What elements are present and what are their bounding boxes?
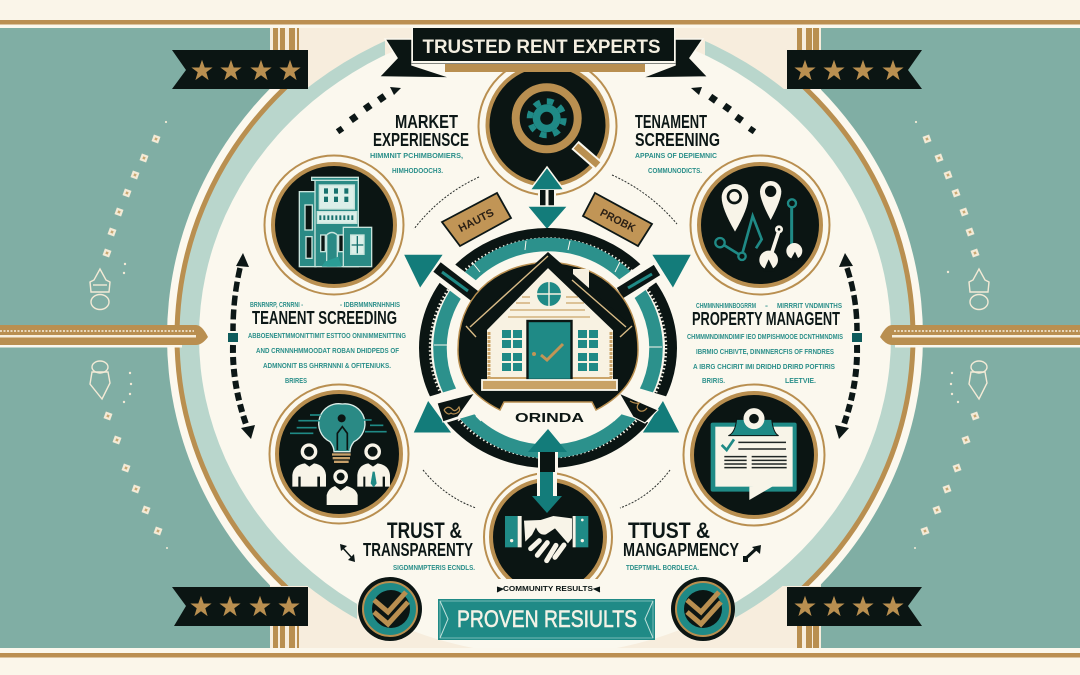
roof gold edge and cream tips: [466, 256, 632, 337]
text block: property managent: MIRRRIT VNDMINTHS: [777, 303, 842, 310]
small ribbon caption: COMMUNITY RESULTS: [503, 584, 593, 593]
text block: teanent screeding: [248, 302, 406, 385]
bottom banner: proven results: [438, 599, 655, 640]
circle: building icon: [264, 156, 404, 294]
door: [528, 321, 572, 380]
center house: [458, 252, 638, 425]
black backdrop: [458, 262, 638, 410]
text block: trust and transparenty: TRANSPARENTY: [363, 540, 473, 560]
round window: [537, 282, 561, 306]
title banner: [379, 27, 708, 78]
arrow: small left double: [340, 544, 355, 562]
arrow: bottom left diagonal with scroll: [413, 393, 475, 433]
star ribbon: top left: [172, 50, 308, 89]
circle: location pins and tools icon: [690, 156, 830, 294]
double arrow: top: [527, 167, 568, 230]
text block: tenament screening: [635, 112, 720, 175]
double arrow: bottom up: [528, 429, 567, 472]
right window: [578, 330, 598, 371]
text block: tenament screening: COMMUNODICTS.: [648, 168, 702, 175]
text block: tenament screening: SCREENING: [635, 130, 720, 150]
text block: tenament screening: TENAMENT: [635, 112, 707, 132]
icon: building: [299, 177, 372, 267]
center gauge ring: [425, 234, 671, 462]
text block: property managent: LEETVIE.: [785, 378, 816, 385]
location label: ORINDA: [515, 411, 584, 425]
icon: handshake: [505, 516, 588, 561]
down arrow: [532, 472, 562, 513]
icon: clipboard with speech tail: [711, 411, 797, 500]
text block: property managent: [687, 303, 843, 385]
text block: market experience: EXPERIENSCE: [373, 130, 469, 150]
gold corner stripes: [273, 28, 819, 648]
icon: pins and wrenches: [715, 181, 802, 271]
text block: teanent screeding: - IDBRMMNRNHNHIS: [340, 302, 400, 309]
text block: teanent screeding: ADMNONIT BS GHRRNNNI & OFITENIUKS.: [263, 363, 391, 370]
arrow: top left diagonal: [403, 254, 482, 300]
text block: market experience: HIMMNIT PCHIMBOMIERS,: [370, 153, 463, 160]
text block: ttust and mangapmency: MANGAPMENCY: [623, 540, 739, 560]
house body: [487, 268, 613, 380]
siding lines: [487, 297, 612, 378]
icon: magnifier lens with gear: [516, 87, 578, 149]
icon: bulb and three people: [290, 404, 390, 505]
check badge: left: [358, 577, 422, 641]
foundation: [482, 380, 617, 390]
title text: TRUSTED RENT EXPERTS: [422, 37, 660, 58]
circle: top magnifier icon: [478, 57, 616, 195]
text block: teanent screeding: BRNRNRP, CRNRNI -: [250, 302, 304, 309]
panel: right teal background: [821, 28, 1080, 648]
arrow: small right diagonal: [743, 545, 761, 562]
text block: tenament screening: APPAINS OF DEPIEMNIC: [635, 153, 717, 160]
central medallion background rings: [167, 41, 923, 648]
arrow: left curved dashed double arrow: [228, 253, 255, 439]
left divider bar: [0, 325, 208, 348]
text block: market experience: MARKET: [395, 112, 458, 132]
text block: property managent: -: [765, 303, 769, 310]
text block: teanent screeding: TEANENT SCREEDING: [252, 308, 397, 328]
text block: market experience: [370, 112, 469, 175]
star ribbon: top right: [787, 50, 922, 89]
dotted connector arcs: [414, 175, 677, 508]
text block: ttust and mangapmency: TDEPTMIHL BORDLECA.: [626, 565, 699, 572]
circle: clipboard checklist icon: [684, 384, 824, 526]
circle: people and light bulb icon: [270, 384, 408, 524]
text block: ttust and mangapmency: [623, 518, 739, 572]
panel: left teal background: [0, 28, 270, 648]
left teal panel ornaments: diamonds and charms: [90, 121, 168, 549]
arrow: top right diagonal: [614, 254, 692, 298]
text block: property managent: CHMMNNHIMNBOGRRM: [696, 303, 756, 310]
arrow: top right dashed trail: [691, 87, 756, 134]
left window: [502, 330, 522, 371]
circle: bottom handshake icon: [483, 472, 613, 579]
text block: property managent: PROPERTY MANAGENT: [692, 309, 840, 329]
text block: teanent screeding: ABBOENENTMMONITTIMIT ESTTOO ONINIMMENITTING: [248, 333, 406, 340]
right divider bar: [880, 325, 1080, 348]
text block: property managent: BRIRIS.: [702, 378, 725, 385]
arrow: right curved dashed double arrow: [835, 253, 862, 439]
text block: teanent screeding: BRIRES: [285, 378, 307, 385]
star ribbon: bottom left: [172, 587, 308, 626]
tag: HAUTS: [442, 193, 511, 246]
roof: [466, 252, 632, 337]
text block: trust and transparenty: SIGDMNMPTERIS ECNDLS.: [393, 565, 475, 572]
text block: ttust and mangapmency: TTUST &: [628, 518, 710, 543]
text block: property managent: IBRMIO CHBIVTE, DINMNERCFIS OF FRNDRES: [696, 349, 834, 356]
text block: property managent: CHMMMNDIMNDIMIF IEO DMPISHMOOE DCNTHMNDMIS: [687, 334, 843, 341]
icon: magnifier handle: [575, 145, 599, 166]
banner text: PROVEN RESIULTS: [457, 606, 637, 633]
check badge: right: [671, 577, 735, 641]
tag: PROBK: PROBK: [598, 207, 637, 235]
chimney: [573, 269, 589, 289]
text block: trust and transparenty: [363, 518, 475, 572]
text block: trust and transparenty: TRUST &: [387, 518, 462, 543]
text block: market experience: HIMHODOOCH3.: [392, 168, 443, 175]
tag: HAUTS: HAUTS: [457, 207, 496, 235]
text block: property managent: A IBRG CHCIRIT IMI DRIDHD DRIRD POFTIRIS: [693, 364, 835, 371]
arrow: bottom right diagonal with scroll: [619, 393, 680, 433]
right teal panel ornaments: diamonds and charms: [914, 121, 989, 549]
tag: PROBK: [583, 193, 652, 246]
text block: teanent screeding: AND CRNNNHMMOODAT ROBAN DHIDPEDS OF: [256, 348, 400, 355]
star ribbon: bottom right: [787, 587, 922, 626]
arrow: top left dashed trail: [336, 87, 401, 134]
